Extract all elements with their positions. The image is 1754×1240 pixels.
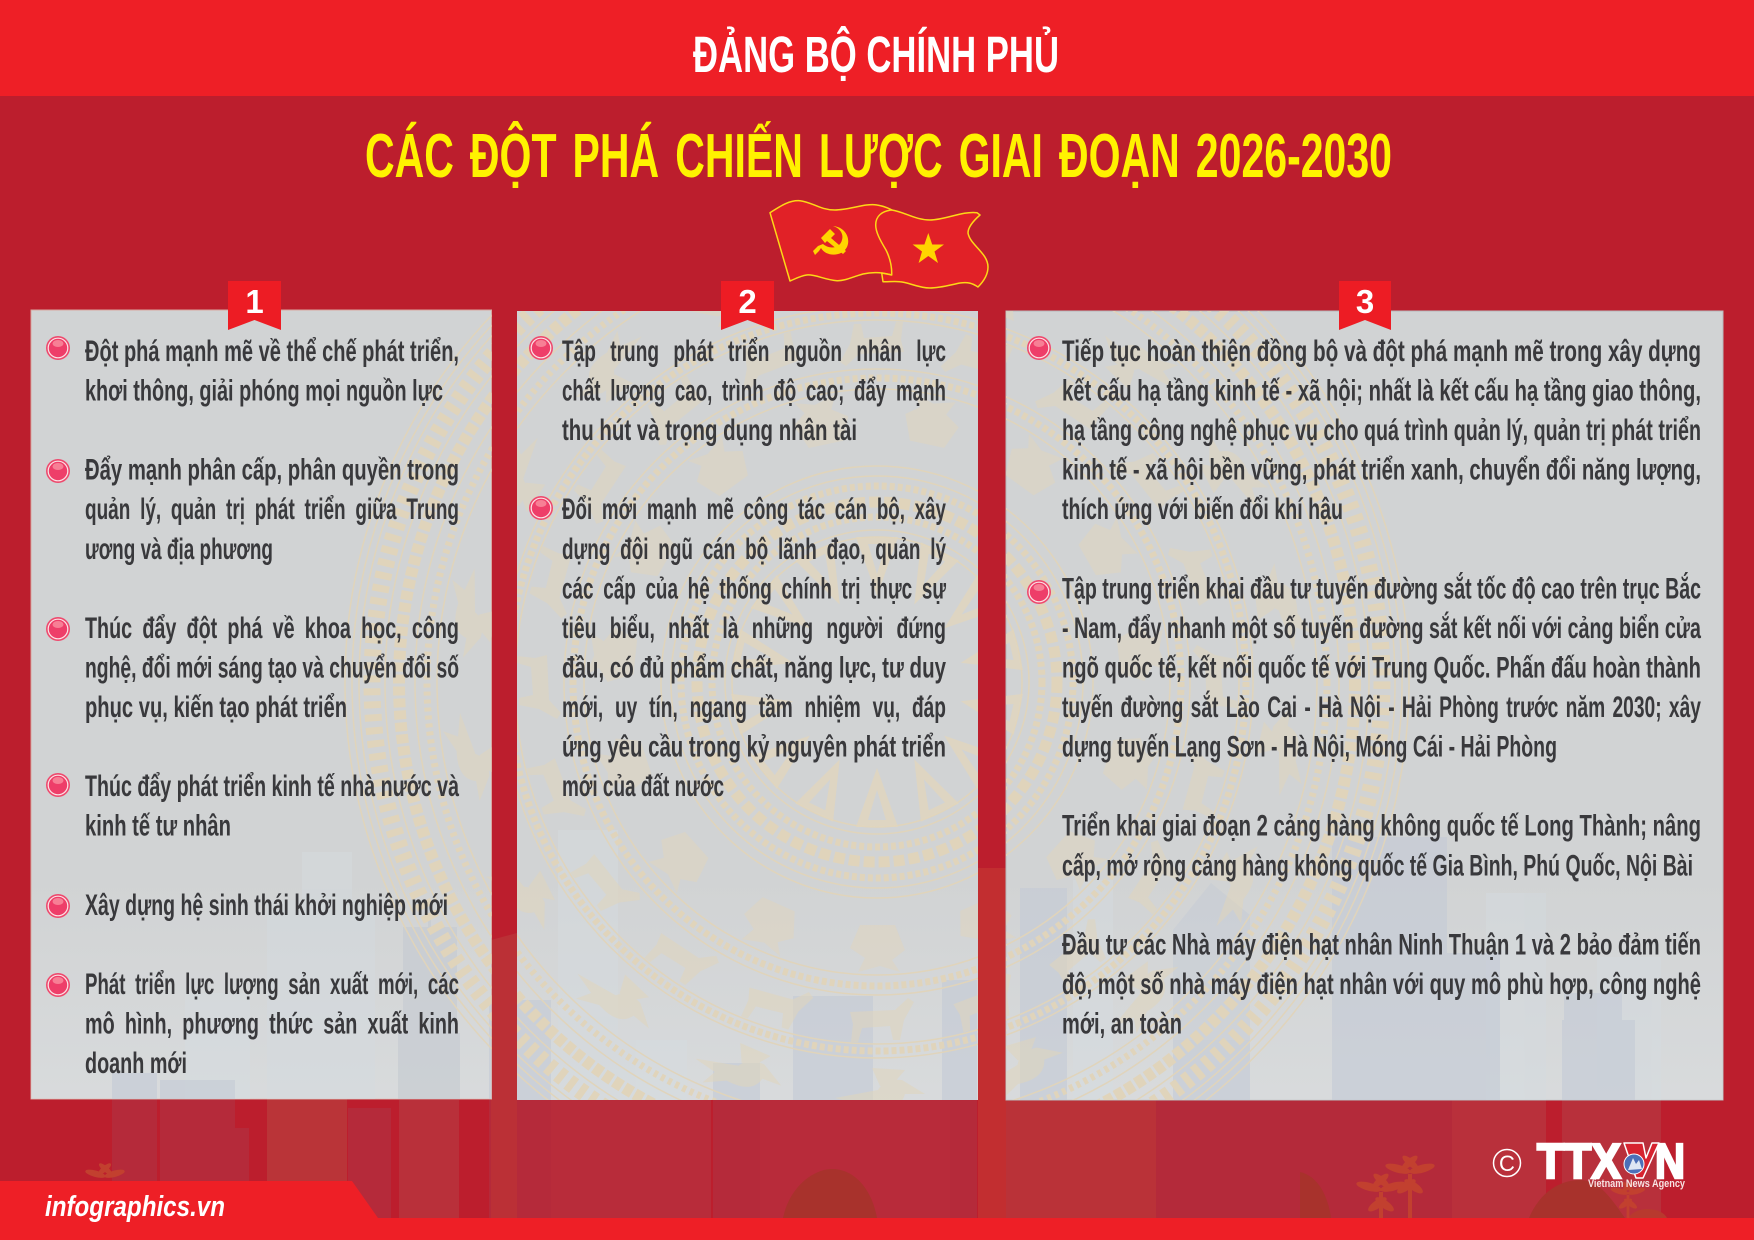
icon: copyright: C xyxy=(1499,1151,1515,1176)
drum pattern on panels xyxy=(344,311,1410,1100)
text: item 4: mới, an toàn xyxy=(1062,1008,1182,1040)
text: item 1: chất lượng cao, trình độ cao; đẩy mạnh xyxy=(562,375,946,408)
icon: party flag xyxy=(770,201,892,281)
bullet 2 xyxy=(46,459,70,483)
panel 3 ribbon number: 3 xyxy=(1356,283,1374,320)
bullet 1 xyxy=(46,336,70,360)
text: item 1: khơi thông, giải phóng mọi nguồn lực xyxy=(85,375,443,408)
footer band xyxy=(0,1218,1754,1240)
panel overlay: pale city skyline xyxy=(31,934,1723,1100)
V letter xyxy=(1624,1143,1659,1178)
icon: globe xyxy=(1624,1154,1644,1174)
drum deer band xyxy=(517,322,1237,1042)
text: item 2 xyxy=(1062,571,1701,764)
panel 3 background xyxy=(1006,311,1723,1100)
panel 3 text and bullets xyxy=(1027,335,1701,1040)
text: item 2: ương và địa phương xyxy=(85,533,273,566)
text: item 1: Tập trung phát triển nguồn nhân lực xyxy=(562,335,946,368)
TTX letters: TTX xyxy=(1537,1135,1621,1189)
text: item 2: Đẩy mạnh phân cấp, phân quyền trong xyxy=(85,454,459,487)
footer tab: infographics.vn xyxy=(0,1181,378,1240)
drum birds band xyxy=(444,311,1309,1100)
text: item 3: phục vụ, kiến tạo phát triển xyxy=(85,691,347,724)
text: item 1: thu hút và trọng dụng nhân tài xyxy=(562,414,857,447)
text: item 1 xyxy=(1062,335,1701,526)
text: item 2: quản lý, quản trị phát triển giữa Trung xyxy=(85,493,459,526)
panel 1 ribbon number: 1 xyxy=(245,283,264,320)
text: item 3 xyxy=(85,612,459,724)
text: item 6: doanh mới xyxy=(85,1047,187,1080)
text: item 3: nghệ, đổi mới sáng tạo và chuyển đổi số xyxy=(85,652,459,684)
bullet 6 xyxy=(46,973,70,997)
footer tab: infographics.vn: infographics.vn xyxy=(45,1191,225,1223)
trees xyxy=(783,1169,1667,1218)
palm trees xyxy=(84,1153,1646,1219)
text: item 2 xyxy=(562,493,946,803)
icon: national flag xyxy=(876,210,988,288)
panel 1 ribbon number xyxy=(228,281,281,330)
text: item 2: đầu, có đủ phẩm chất, năng lực, tư duy xyxy=(562,652,946,684)
drum figures band xyxy=(586,393,1168,972)
text: item 2: mới, uy tín, ngang tầm nhiệm vụ, đáp xyxy=(562,691,946,724)
skyline behind panels xyxy=(84,837,1667,1240)
tagline: Vietnam News Agency xyxy=(1588,1178,1686,1190)
header band: ĐẢNG BỘ CHÍNH PHỦ xyxy=(693,25,1059,83)
text: item 3 xyxy=(1062,810,1701,882)
text: item 1 xyxy=(85,335,459,408)
panel 2 background xyxy=(517,311,978,1100)
drum star rays xyxy=(731,537,1023,827)
text: item 6 xyxy=(85,968,459,1080)
text: item 4 xyxy=(85,770,459,843)
panel 1 text and bullets xyxy=(46,335,459,1080)
text: item 1 xyxy=(562,335,946,447)
bullet 4 xyxy=(46,773,70,797)
icon: copyright xyxy=(1494,1150,1520,1176)
bullet 1 xyxy=(529,336,553,360)
header band xyxy=(0,0,1754,96)
text: item 6: Phát triển lực lượng sản xuất mới, các xyxy=(85,968,459,1001)
panel 2 ribbon number xyxy=(721,281,774,330)
panel 2 text and bullets xyxy=(529,335,946,803)
text: item 2: Đổi mới mạnh mẽ công tác cán bộ, xây xyxy=(562,493,946,526)
panel 1 background xyxy=(31,310,492,1099)
icon: party and national flags xyxy=(770,201,988,288)
text: item 4 xyxy=(1062,928,1701,1040)
bullet 3 xyxy=(46,617,70,641)
text: item 4: kinh tế tư nhân xyxy=(85,810,231,843)
text: item 3: Thúc đẩy đột phá về khoa học, công xyxy=(85,612,459,645)
text: item 5: Xây dựng hệ sinh thái khởi nghiệp mới xyxy=(85,889,448,922)
panel 2 ribbon number: 2 xyxy=(738,283,757,320)
bullet 1 xyxy=(1027,336,1051,360)
text: item 6: mô hình, phương thức sản xuất kinh xyxy=(85,1008,459,1040)
text: item 1: thích ứng với biến đổi khí hậu xyxy=(1062,493,1343,526)
bullet 2 xyxy=(1027,580,1051,604)
text: item 2: ứng yêu cầu trong kỷ nguyên phát triển xyxy=(562,731,946,764)
bullet 5 xyxy=(46,894,70,918)
drum rings xyxy=(344,311,1410,1100)
text: item 2: dựng đội ngũ cán bộ lãnh đạo, quản lý xyxy=(562,533,946,566)
bullet 2 xyxy=(529,496,553,520)
text: item 2: tiêu biểu, nhất là những người đứng xyxy=(562,612,946,645)
text: item 2 xyxy=(85,454,459,566)
text: item 4: Thúc đẩy phát triển kinh tế nhà nước và xyxy=(85,770,459,803)
text: item 2: mới của đất nước xyxy=(562,770,724,803)
text: item 2: các cấp của hệ thống chính trị thực sự xyxy=(562,572,946,605)
N letter: N xyxy=(1655,1135,1685,1189)
panel 3 ribbon number xyxy=(1339,281,1391,330)
logo: copyright TTXVN xyxy=(1494,1135,1686,1190)
text: item 1: Đột phá mạnh mẽ về thể chế phát triển, xyxy=(85,335,459,368)
